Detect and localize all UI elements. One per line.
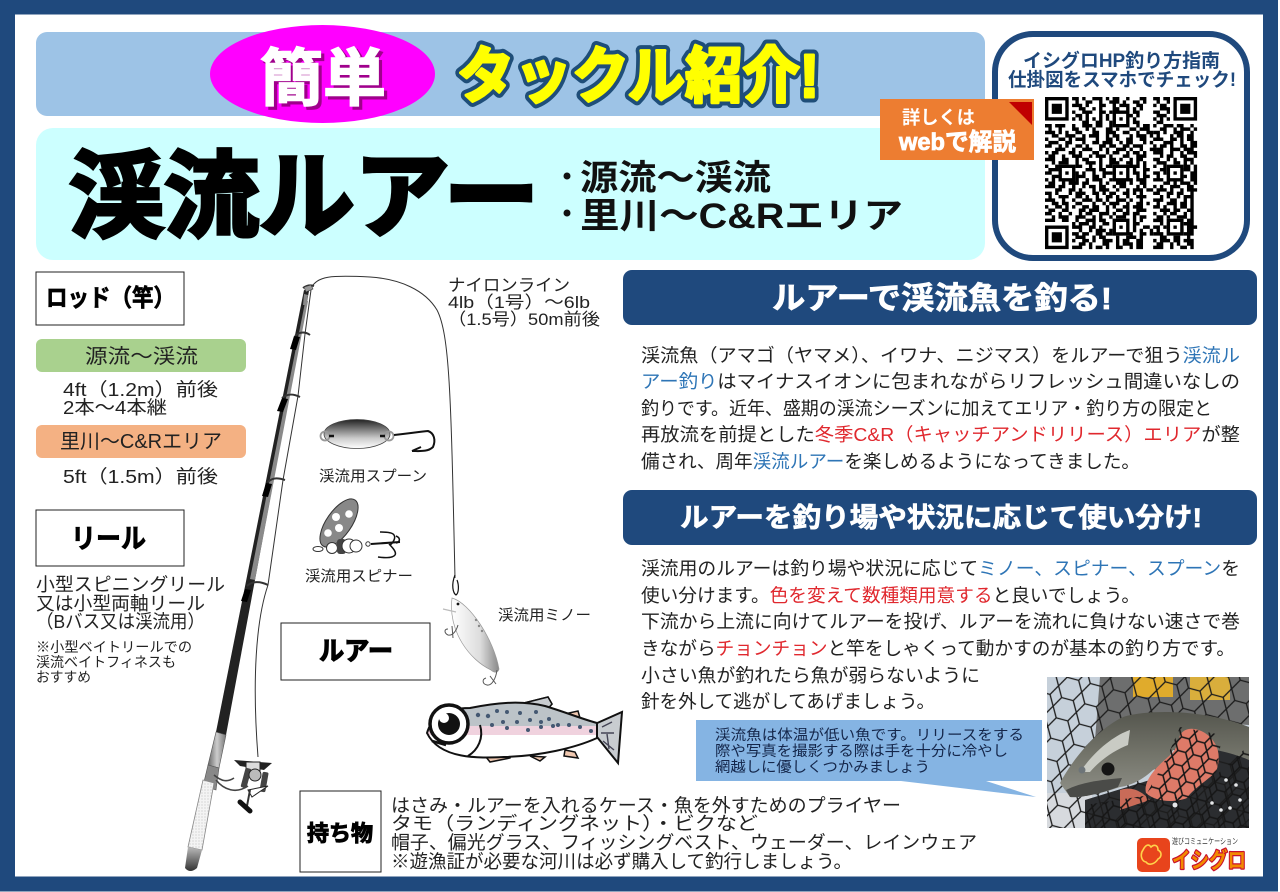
heading bar 2 xyxy=(623,490,1257,545)
rod length C&R: 5ft（1.5m）前後 xyxy=(63,466,218,487)
QR code pattern xyxy=(1045,97,1197,249)
reel note: 渓流ベイトフィネスも xyxy=(36,654,176,670)
areas: 里川～C&Rエリア xyxy=(580,197,903,236)
paragraph 2: 下流から上流に向けてルアーを投げ、ルアーを流れに負けない速さで巻 xyxy=(641,611,1240,632)
callout: web xyxy=(880,99,1034,160)
paragraph 2 xyxy=(641,558,1240,712)
callout: release tip: 際や写真を撮影する際は手を十分に冷やし xyxy=(715,743,1008,760)
heading box: reel: リール xyxy=(71,524,146,554)
finder and alignment marks xyxy=(1045,97,1197,249)
butt cap xyxy=(185,847,202,871)
paragraph 2: 渓流用のルアーは釣り場や状況に応じて ミノー、スピナー、スプーンを xyxy=(641,558,1240,579)
label: minnow: 渓流用ミノー xyxy=(498,607,591,624)
rod length upstream: 4ft（1.2m）前後 xyxy=(63,379,218,400)
reel xyxy=(214,760,272,811)
logo xyxy=(1137,836,1246,873)
line label xyxy=(448,276,600,329)
paragraph 2: 使い分けます。色を変えて数種類用意すると良いでしょう。 xyxy=(641,585,1140,606)
tag: upstream xyxy=(36,339,246,372)
gear list: 帽子、偏光グラス、フィッシングベスト、ウェーダー、レインウェア xyxy=(391,832,977,853)
callout: release tip xyxy=(696,720,1042,797)
main title: 渓流ルアー xyxy=(69,144,539,249)
tail xyxy=(595,712,622,763)
reel description: （Bバス又は渓流用） xyxy=(36,611,205,632)
paragraph 2: 針を外して逃がしてあげましょう。 xyxy=(641,691,935,712)
icon: minnow lure xyxy=(443,575,499,685)
callout: release tip: 渓流魚は体温が低い魚です。リリースをする xyxy=(715,727,1024,744)
heading: タックル紹介: タックル紹介! xyxy=(457,42,819,110)
fins xyxy=(482,697,580,762)
panel: reel spec xyxy=(36,510,225,685)
icon: spinner lure xyxy=(313,493,400,558)
reel note: ※小型ベイトリールでの xyxy=(36,639,192,655)
areas xyxy=(564,159,903,236)
reel description: 小型スピニングリール xyxy=(36,574,225,595)
badge: 簡単: 簡単 xyxy=(263,48,389,117)
fore grip xyxy=(208,732,226,768)
heading box: rod xyxy=(36,272,184,325)
heading box: lure: ルアー xyxy=(319,636,393,666)
gear list: ※遊漁証が必要な河川は必ず購入して釣行しましょう。 xyxy=(391,851,852,872)
gear list xyxy=(391,795,977,872)
reel description xyxy=(36,574,225,632)
title band xyxy=(36,25,985,123)
logo: イシグロ xyxy=(1172,848,1246,873)
heading box: rod: ロッド（竿） xyxy=(46,285,175,312)
eye xyxy=(430,705,468,743)
callout: web: webで解説 xyxy=(898,129,1016,156)
label: spoon: 渓流用スプーン xyxy=(319,468,427,485)
paragraph 2: 小さい魚が釣れたら魚が弱らないように xyxy=(641,665,980,686)
rod illustration xyxy=(185,276,455,871)
QR heading: イシグロHP釣り方指南 xyxy=(1023,49,1220,72)
rod length upstream xyxy=(63,379,218,418)
paragraph 1: 渓流魚（アマゴ（ヤマメ）、イワナ、ニジマス）をルアーで狙う 渓流ル xyxy=(641,345,1240,366)
gill xyxy=(468,725,481,756)
paragraph 1: 再放流を前提とした 冬季C&R（キャッチアンドリリース）エリア が整 xyxy=(641,424,1240,445)
red corner xyxy=(1009,102,1032,125)
icon: trout xyxy=(427,695,622,763)
badge: 簡単: 簡単 xyxy=(260,45,386,114)
body xyxy=(427,703,597,757)
line label: 4lb（1号）～6lb xyxy=(448,293,590,312)
gear list: はさみ・ルアーを入れるケース・魚を外すためのプライヤー xyxy=(391,795,901,816)
tag: satoyama: 里川～C&Rエリア xyxy=(60,431,222,453)
rod blank xyxy=(216,290,309,735)
reel note xyxy=(36,639,192,685)
right part of QR xyxy=(1153,99,1197,247)
paragraph 1: アー釣りはマイナスイオンに包まれながらリフレッシュ間違いなしの xyxy=(641,371,1240,392)
line label: ナイロンライン xyxy=(448,276,570,295)
paragraph 1: 備され、周年渓流ルアーを楽しめるようになってきました。 xyxy=(641,451,1140,472)
paragraph 1 xyxy=(641,345,1240,472)
heading box: reel xyxy=(36,510,184,566)
heading box: lure xyxy=(281,623,430,680)
tag: upstream: 源流～渓流 xyxy=(85,345,198,368)
rod length upstream: 2本～4本継 xyxy=(63,397,167,418)
line label: （1.5号）50m前後 xyxy=(448,310,600,329)
reel description: 又は小型両軸リール xyxy=(36,593,205,614)
logo: 遊びコミュニケーション xyxy=(1172,836,1238,846)
heading box: gear: 持ち物 xyxy=(307,821,373,846)
callout: release tip: 網越しに優しくつかみましょう xyxy=(715,759,930,776)
gear list: タモ（ランディングネット）・ビクなど xyxy=(391,813,758,834)
tag: satoyama xyxy=(36,425,246,458)
cork handle xyxy=(188,780,214,850)
panel: fishing with lures xyxy=(623,270,1257,472)
label: spinner: 渓流用スピナー xyxy=(305,568,413,585)
QR heading xyxy=(1008,49,1236,91)
heading: タックル紹介: タックル紹介! xyxy=(457,42,819,110)
QR heading: 仕掛図をスマホでチェック! xyxy=(1008,69,1236,91)
heading bar 1 xyxy=(623,270,1257,325)
heading bar 2: ルアーを釣り場や状況に応じて使い分け! xyxy=(680,503,1202,533)
areas: 源流～渓流 xyxy=(580,159,771,198)
fishing line xyxy=(311,276,455,578)
rod wraps and guides xyxy=(247,285,314,586)
panel: rod spec xyxy=(36,272,246,487)
photo: trout in landing net xyxy=(1047,677,1249,828)
reel note: おすすめ xyxy=(36,669,91,685)
callout: web: 詳しくは xyxy=(902,107,975,128)
paragraph 2: きながらチョンチョンと竿をしゃくって動かすのが基本の釣り方です。 xyxy=(641,638,1235,659)
panel: QR code xyxy=(995,34,1247,258)
subject band xyxy=(36,128,985,260)
heading bar 1: ルアーで渓流魚を釣る! xyxy=(772,281,1112,316)
icon: spoon lure xyxy=(320,420,434,451)
heading box: gear xyxy=(300,791,381,872)
panel: using lures by situation xyxy=(623,490,1257,712)
badge: 簡単 xyxy=(210,25,435,123)
paragraph 1: 釣りです。近年、盛期の渓流シーズンに加えてエリア・釣り方の限定と xyxy=(641,398,1212,419)
